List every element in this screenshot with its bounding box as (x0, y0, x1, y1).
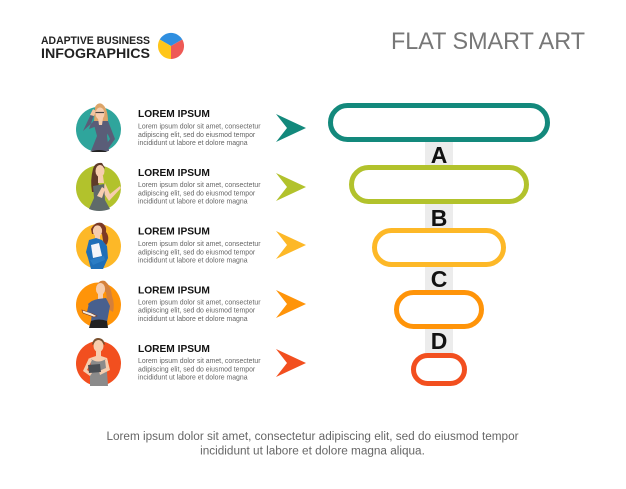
heading: LOREM IPSUM (138, 344, 210, 355)
label C: C (431, 266, 447, 292)
pill 1 (330, 106, 548, 140)
logo text: INFOGRAPHICS (41, 45, 150, 61)
footer text: Lorem ipsum dolor sit amet, consectetur adipiscing elit, sed do eiusmod tempor (106, 430, 519, 443)
text block: incididunt ut labore et dolore magna (138, 198, 248, 206)
icon: avatar 3 (76, 223, 121, 269)
icon: avatar 5 (76, 338, 121, 386)
funnel diagram (330, 106, 548, 384)
row 2 (76, 163, 306, 211)
text block: Lorem ipsum dolor sit amet, consectetur (138, 358, 261, 365)
text block: adipiscing elit, sed do eiusmod tempor (138, 132, 256, 139)
text block: adipiscing elit, sed do eiusmod tempor (138, 249, 256, 256)
logo text: ADAPTIVE BUSINESS (41, 35, 150, 47)
row 4 (76, 281, 306, 328)
text block: Lorem ipsum dolor sit amet, consectetur (138, 299, 261, 306)
label A: A (431, 142, 447, 168)
arrow (276, 290, 306, 318)
text block: incididunt ut labore et dolore magna (138, 258, 248, 264)
heading: LOREM IPSUM (138, 227, 210, 238)
title: FLAT SMART ART (391, 29, 585, 55)
label B: B (431, 205, 447, 231)
heading: LOREM IPSUM (138, 285, 210, 296)
text block: adipiscing elit, sed do eiusmod tempor (138, 366, 256, 373)
text block: Lorem ipsum dolor sit amet, consectetur (138, 124, 261, 130)
row 5 (76, 338, 306, 386)
text block: adipiscing elit, sed do eiusmod tempor (138, 308, 256, 315)
pill 4 (396, 292, 482, 326)
icon: avatar 1 (76, 103, 121, 152)
text block: Lorem ipsum dolor sit amet, consectetur (138, 241, 261, 248)
logo text (41, 35, 150, 61)
text block: incididunt ut labore et dolore magna (138, 316, 248, 323)
heading: LOREM IPSUM (138, 109, 210, 120)
label D: D (431, 328, 447, 354)
connector bar (425, 140, 453, 355)
icon: logo pie (158, 33, 184, 59)
text block: incididunt ut labore et dolore magna (138, 140, 248, 147)
icon: avatar 4 (76, 281, 121, 328)
text block: Lorem ipsum dolor sit amet, consectetur (138, 182, 261, 189)
icon: avatar 2 (76, 163, 121, 211)
arrow (276, 114, 306, 142)
arrow (276, 173, 306, 201)
arrow (276, 231, 306, 259)
heading: LOREM IPSUM (138, 168, 210, 179)
text block: adipiscing elit, sed do eiusmod tempor (138, 190, 256, 197)
text block: incididunt ut labore et dolore magna (138, 374, 248, 382)
pill 5 (414, 356, 464, 384)
row 3 (76, 223, 306, 269)
arrow (276, 349, 306, 377)
row 1 (76, 103, 306, 152)
footer text: incididunt ut labore et dolore magna aliqua. (200, 444, 425, 458)
pill 3 (374, 230, 504, 264)
pill 2 (352, 168, 526, 202)
